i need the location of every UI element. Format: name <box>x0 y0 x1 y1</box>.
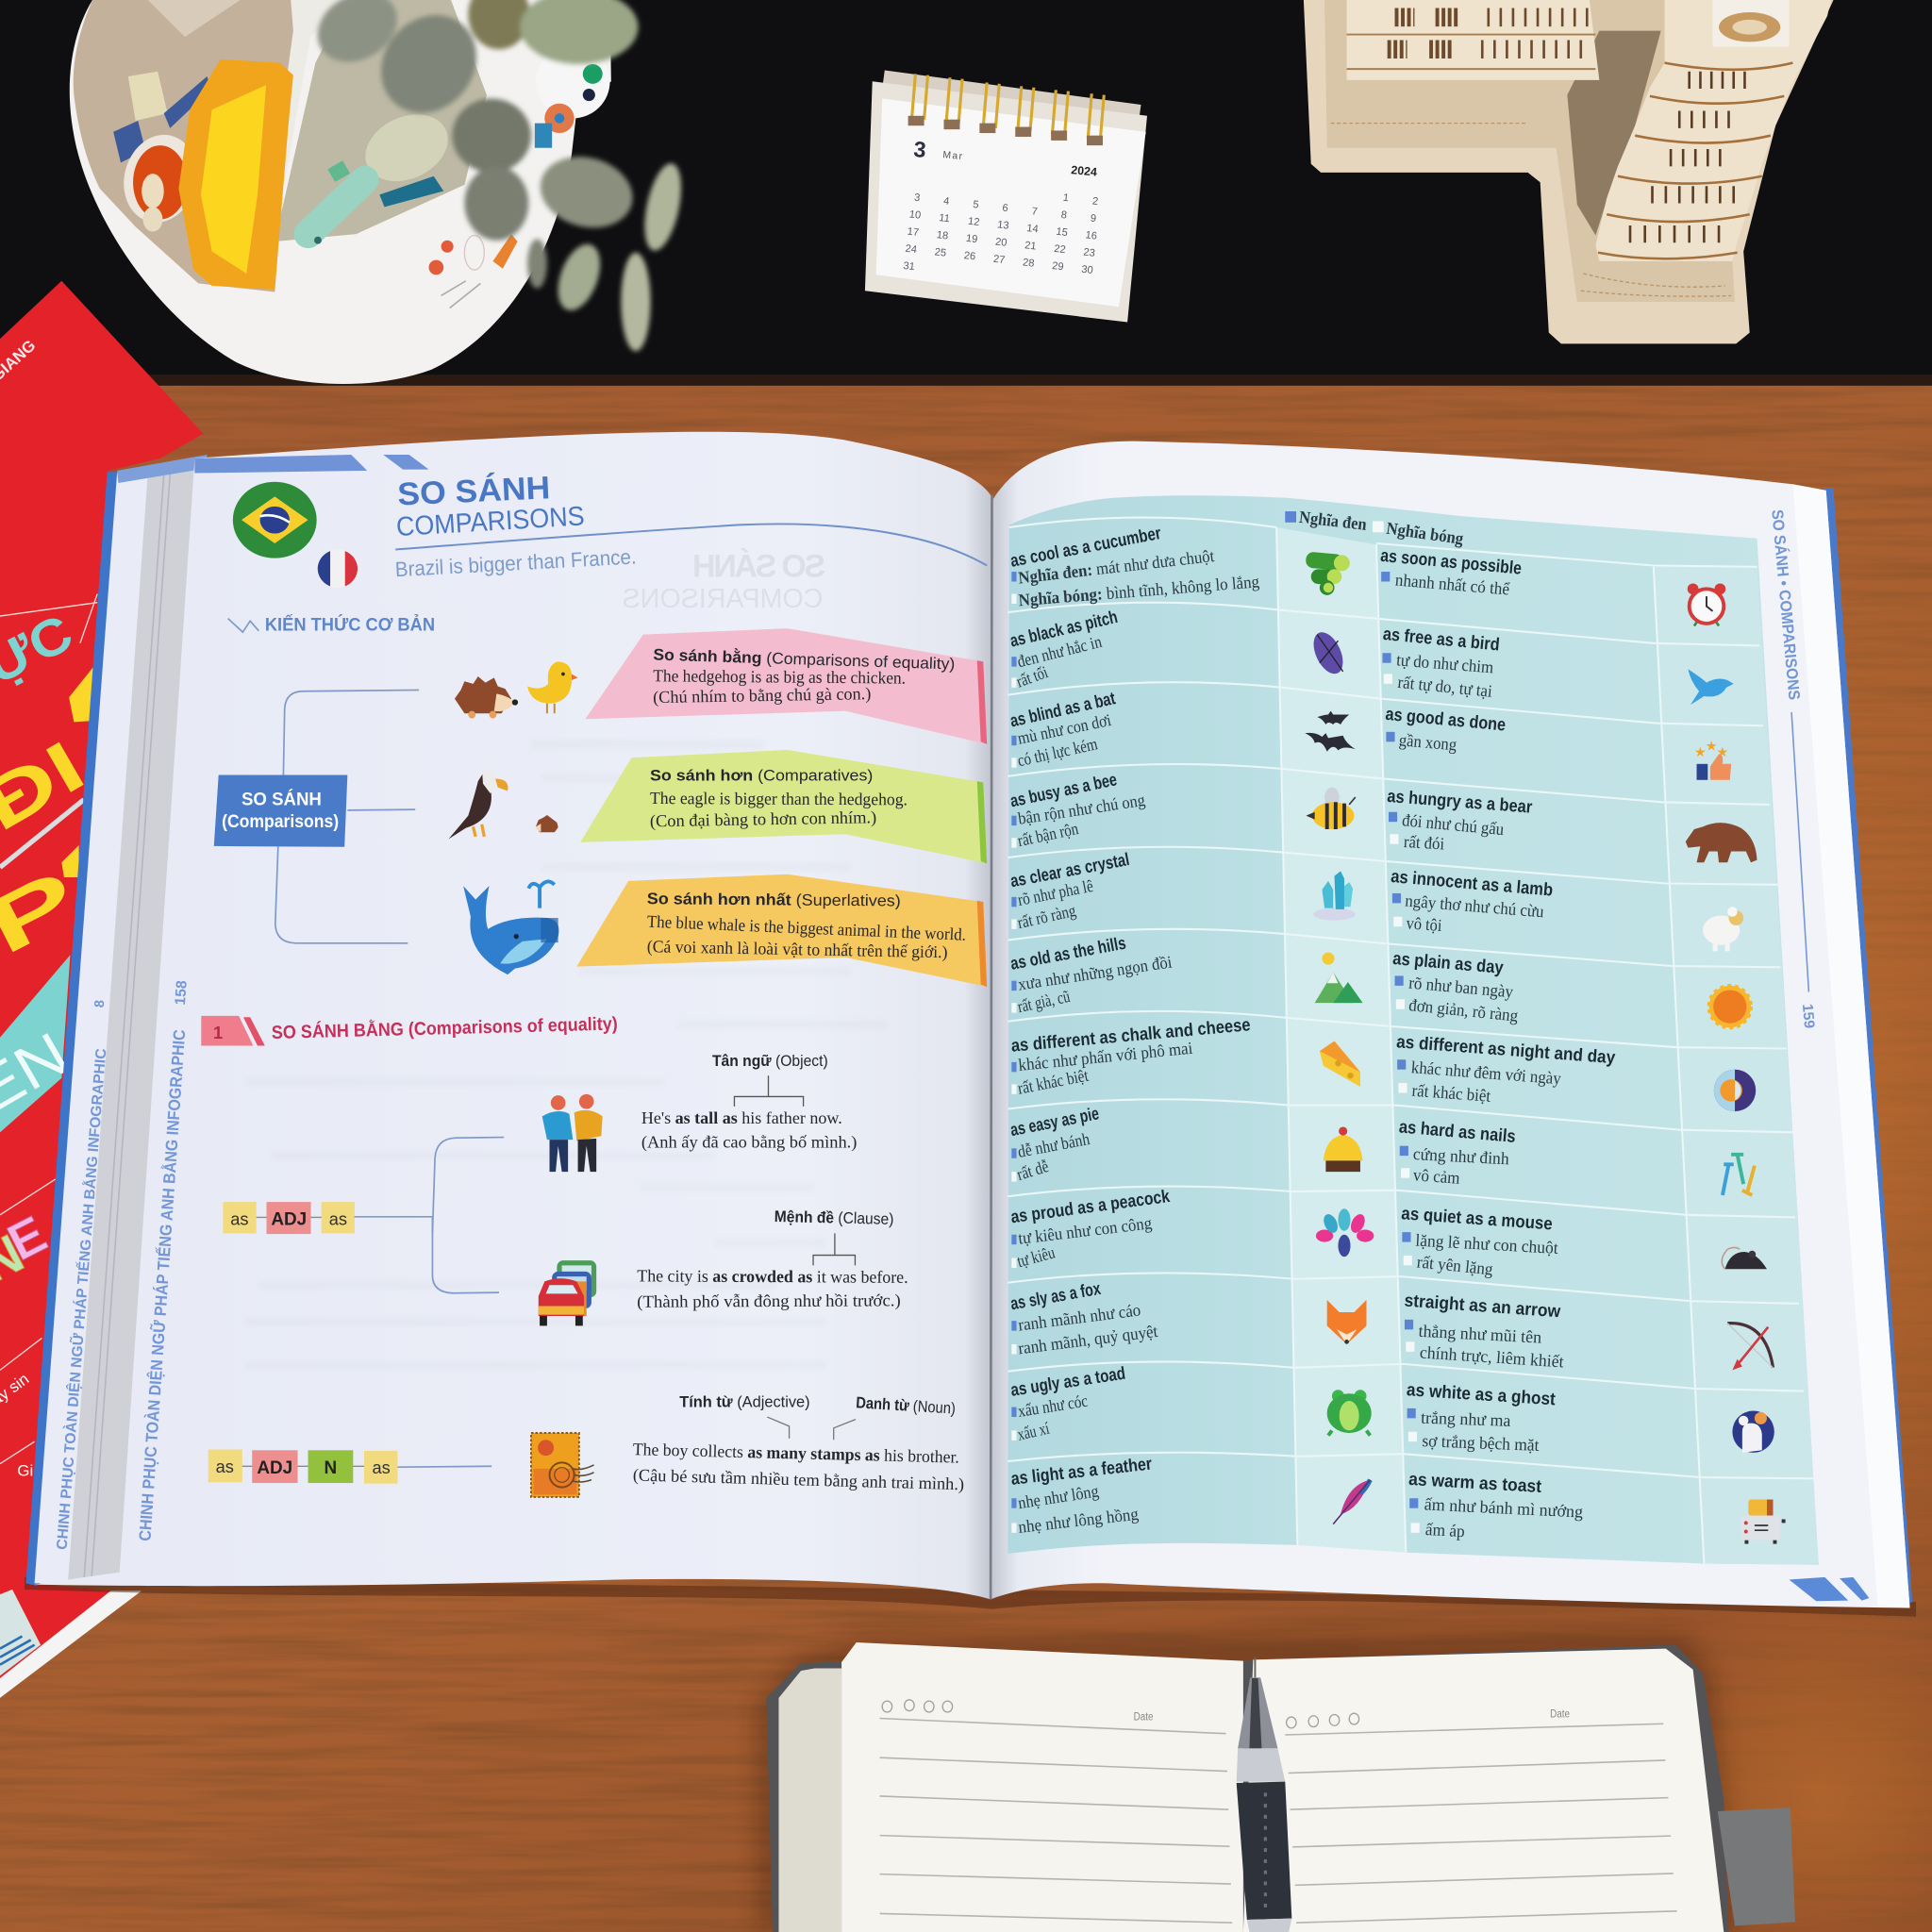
formula: as ADJ as: ADJ <box>271 1209 307 1229</box>
desk calendar March 2024: 2024 <box>1071 163 1098 179</box>
page number 8: 8 <box>92 1000 108 1008</box>
as white as a ghost: sợ trắng bệch mặt <box>1422 1431 1540 1455</box>
as quiet as a mouse <box>1401 1204 1558 1279</box>
shadow under open book <box>25 1577 1916 1617</box>
icon: bear <box>1686 823 1757 862</box>
as warm as toast: ấm áp <box>1424 1520 1465 1541</box>
desk calendar March 2024: 5 <box>973 199 979 211</box>
banner: comparisons of equality: (Chú nhím to bằng chú gà con.) <box>653 684 871 708</box>
table background <box>1008 495 1819 1565</box>
desk calendar March 2024: 12 <box>967 216 980 228</box>
plant pot with stationery <box>70 0 688 384</box>
example: The city is as crowded: (Thành phố vẫn đông như hồi trước.) <box>637 1291 901 1312</box>
desk calendar March 2024: 17 <box>907 226 920 239</box>
icon: bow and arrow <box>1727 1324 1774 1370</box>
straight as an arrow: thẳng như mũi tên <box>1418 1322 1542 1347</box>
annotation: adjective and noun: Tính từ (Adjective) <box>679 1393 810 1411</box>
example: The boy collects: The boy collects as many stamps as his brother. <box>633 1440 959 1467</box>
as ugly as a toad: as ugly as a toad <box>1009 1364 1126 1401</box>
formula: as ADJ as: as <box>329 1208 347 1228</box>
desk calendar March 2024: 19 <box>965 233 978 245</box>
right page <box>991 441 1909 1607</box>
formula: as ADJ as <box>223 1202 355 1234</box>
eucalyptus leaves <box>305 0 688 351</box>
icon: alarm clock <box>1688 583 1725 626</box>
as clear as crystal: rõ như pha lê <box>1016 876 1094 909</box>
icon: small hedgehog <box>535 815 558 832</box>
show-through mirrored heading: SO SÁNH <box>692 548 825 584</box>
desk calendar March 2024: 25 <box>934 246 947 259</box>
black desk mat <box>0 0 1932 386</box>
icon: mouse <box>1722 1247 1767 1269</box>
icon: two people <box>542 1094 603 1172</box>
banner: comparatives: The eagle is bigger than the hedgehog. <box>650 789 908 808</box>
left notebook page <box>841 1642 1243 1932</box>
right column: similes <box>1379 546 1616 1541</box>
as hungry as a bear: rất đói <box>1403 832 1445 854</box>
icon: fox <box>1327 1300 1366 1344</box>
banner: superlatives <box>576 874 987 987</box>
as plain as day: đơn giản, rõ ràng <box>1407 995 1519 1025</box>
as warm as toast: ấm như bánh mì nướng <box>1424 1494 1584 1522</box>
notebook with pen: Date <box>1550 1708 1570 1721</box>
desk calendar March 2024: 2 <box>1091 195 1099 208</box>
as busy as a bee <box>1008 770 1146 850</box>
as free as a bird: rất tự do, tự tại <box>1397 673 1493 701</box>
left page <box>35 432 993 1599</box>
desk calendar March 2024: 30 <box>1081 264 1093 276</box>
red book under main book: E <box>0 1204 56 1272</box>
desk calendar March 2024: 22 <box>1054 243 1066 256</box>
show-through mirrored heading: COMPARISONS <box>623 584 823 614</box>
icon: sun <box>1709 986 1751 1027</box>
icon: peacock <box>1316 1208 1374 1257</box>
as hungry as a bear: as hungry as a bear <box>1387 787 1533 818</box>
as blind as a bat <box>1008 689 1118 770</box>
as innocent as a lamb: vô tội <box>1406 913 1442 935</box>
as different as night and day <box>1395 1032 1616 1106</box>
desk calendar March 2024: 20 <box>994 237 1008 249</box>
as blind as a bat: as blind as a bat <box>1008 689 1118 731</box>
icon: pitch <box>1307 627 1349 678</box>
as different as night and day: as different as night and day <box>1395 1032 1616 1068</box>
vertical book title on left page: CHINH PHỤC TOÀN DIỆN NGỮ PHÁP TIẾNG ANH BẰNG INFOGRAPHIC <box>134 1028 189 1541</box>
banner: comparisons of equality: The hedgehog is as big as the chicken. <box>653 666 906 688</box>
as different as night and day: rất khác biệt <box>1411 1081 1491 1106</box>
pen <box>1237 1657 1291 1932</box>
icon: bee <box>1306 788 1356 829</box>
desk calendar March 2024: 15 <box>1056 226 1068 239</box>
desk calendar March 2024: 4 <box>942 195 950 208</box>
as white as a ghost <box>1406 1380 1557 1455</box>
icon: stars and thumb up: ★ <box>1694 745 1707 760</box>
as hungry as a bear: đói như chú gấu <box>1401 810 1505 839</box>
legend: literal and figurative meaning <box>1285 508 1465 548</box>
as quiet as a mouse: as quiet as a mouse <box>1401 1204 1553 1234</box>
heading: So sánh Comparisons: COMPARISONS <box>395 501 585 542</box>
as soon as possible <box>1379 546 1523 599</box>
vertical book title on outer edge: CHINH PHỤC TOÀN DIỆN NGỮ PHÁP TIẾNG ANH BẰNG INFOGRAPHIC <box>52 1048 109 1550</box>
icon: frog <box>1327 1390 1372 1436</box>
as blind as a bat: có thị lực kém <box>1016 734 1099 770</box>
annotation: clause: Mệnh đề (Clause) <box>774 1208 894 1228</box>
desk calendar March 2024: 24 <box>905 243 918 256</box>
example sentence: Brazil is bigger than France: Brazil is bigger than France. <box>394 544 637 581</box>
as different as chalk and cheese <box>1010 1015 1251 1098</box>
example: He's as tall as his father <box>641 1108 857 1153</box>
as quiet as a mouse: lặng lẽ như con chuột <box>1415 1231 1558 1257</box>
as plain as day <box>1391 949 1519 1025</box>
straight as an arrow: straight as an arrow <box>1404 1291 1561 1322</box>
as different as chalk and cheese: as different as chalk and cheese <box>1010 1015 1251 1057</box>
as hard as nails: vô cảm <box>1412 1165 1460 1188</box>
icon: mountain <box>1315 953 1363 1003</box>
as cool as a cucumber: Nghĩa đen: mát như dưa chuột <box>1017 546 1215 588</box>
as black as pitch <box>1008 608 1120 691</box>
right blue cover edge <box>1824 488 1912 1607</box>
formula: as ADJ N as: as <box>216 1457 234 1476</box>
left page stack <box>68 460 197 1585</box>
wooden Big Ben model <box>1304 0 1834 343</box>
as easy as pie: as easy as pie <box>1008 1104 1101 1141</box>
desk calendar March 2024: 28 <box>1022 257 1035 270</box>
as good as done: gần xong <box>1398 730 1457 754</box>
desk calendar March 2024: Mar <box>942 150 964 162</box>
annotation: clause <box>774 1208 894 1265</box>
show-through mirrored heading <box>623 548 825 614</box>
box: So sánh Comparisons <box>214 775 347 847</box>
desk calendar March 2024: 7 <box>1031 206 1038 218</box>
as plain as day: as plain as day <box>1391 949 1505 978</box>
icon: cupcake pie <box>1324 1126 1363 1172</box>
as soon as possible: nhanh nhất có thể <box>1394 570 1511 599</box>
connector: as ADJ as branches <box>355 1138 504 1293</box>
as hungry as a bear <box>1387 787 1533 854</box>
desk calendar March 2024: 26 <box>963 250 976 262</box>
as proud as a peacock: tự kiêu như con công <box>1017 1213 1153 1248</box>
as good as done <box>1385 705 1507 754</box>
legend: literal and figurative meaning: Nghĩa đen <box>1298 508 1368 534</box>
as busy as a bee: bận rộn như chú ong <box>1017 791 1146 828</box>
as innocent as a lamb: ngây thơ như chú cừu <box>1405 891 1544 921</box>
notebook with pen <box>754 1637 1795 1932</box>
as light as a feather: nhẹ như lông <box>1017 1481 1100 1512</box>
as ugly as a toad: xấu xí <box>1016 1419 1051 1444</box>
box: So sánh Comparisons: SO SÁNH <box>242 790 322 810</box>
icon: eagle <box>448 766 508 839</box>
as old as the hills: xưa như những ngọn đồi <box>1017 952 1174 994</box>
icon: blue whale <box>463 881 558 974</box>
formula: as ADJ N as: ADJ <box>257 1458 292 1478</box>
heading: So sánh Comparisons <box>395 470 987 566</box>
as different as chalk and cheese: khác như phấn với phô mai <box>1018 1039 1193 1074</box>
icon: ghost <box>1732 1411 1774 1453</box>
as cool as a cucumber: Nghĩa bóng: bình tĩnh, không lo lắng <box>1018 572 1260 609</box>
banner: comparisons of equality: So sánh bằng (Comparisons of equality) <box>653 645 956 673</box>
open book <box>25 432 1912 1607</box>
icon: nails <box>1723 1155 1755 1195</box>
banner: superlatives: So sánh hơn nhất (Superlatives) <box>647 890 901 910</box>
example: He's as tall as his father: (Anh ấy đã cao bằng bố mình.) <box>641 1133 857 1153</box>
icon: France flag <box>317 549 358 588</box>
icon: stars and thumb up: ★ <box>1716 745 1728 760</box>
as quiet as a mouse: rất yên lặng <box>1416 1252 1494 1279</box>
icon: feather <box>1333 1480 1370 1524</box>
formula: as ADJ N as <box>208 1450 491 1484</box>
as white as a ghost: trắng như ma <box>1421 1408 1511 1430</box>
desk calendar March 2024: 3 <box>913 192 921 204</box>
banner: superlatives: (Cá voi xanh là loài vật to nhất trên thế giới.) <box>647 937 948 962</box>
as sly as a fox: ranh mãnh như cáo <box>1017 1300 1141 1335</box>
as hard as nails <box>1398 1117 1516 1188</box>
desk calendar March 2024: 21 <box>1024 240 1037 253</box>
as easy as pie <box>1008 1104 1101 1184</box>
as clear as crystal: as clear as crystal <box>1008 850 1131 891</box>
example: The boy collects: (Cậu bé sưu tầm nhiều tem bằng anh trai mình.) <box>633 1465 964 1494</box>
as good as done: as good as done <box>1385 705 1507 736</box>
section label: Kiến thức cơ bản: KIẾN THỨC CƠ BẢN <box>265 613 435 636</box>
heading: So sánh Comparisons: SO SÁNH <box>397 470 551 513</box>
as black as pitch: rất tối <box>1014 662 1050 691</box>
as sly as a fox <box>1009 1279 1158 1357</box>
as warm as toast: as warm as toast <box>1408 1470 1542 1497</box>
as white as a ghost: as white as a ghost <box>1406 1380 1557 1409</box>
legend: literal and figurative meaning: Nghĩa bóng <box>1385 519 1465 548</box>
desk calendar March 2024: 9 <box>1090 213 1097 225</box>
icon: stars and thumb up <box>1694 739 1731 780</box>
right notebook page <box>1243 1649 1724 1932</box>
straight as an arrow: chính trực, liêm khiết <box>1419 1342 1564 1371</box>
as different as chalk and cheese: rất khác biệt <box>1016 1066 1090 1098</box>
as clear as crystal <box>1008 850 1131 932</box>
desk calendar March 2024: 29 <box>1052 260 1064 273</box>
icon: cucumber <box>1306 552 1350 595</box>
page number 159: 159 <box>1799 1003 1817 1029</box>
as ugly as a toad <box>1009 1364 1126 1444</box>
as warm as toast <box>1408 1470 1584 1541</box>
desk calendar March 2024: 6 <box>1002 203 1008 214</box>
desk calendar March 2024: 14 <box>1026 223 1039 235</box>
formula: as ADJ N as: as <box>372 1457 391 1477</box>
straight as an arrow <box>1404 1291 1564 1371</box>
annotation: adjective and noun: Danh từ (Noun) <box>856 1393 956 1418</box>
as innocent as a lamb: as innocent as a lamb <box>1390 867 1554 901</box>
icon: crystal <box>1313 871 1356 921</box>
icon: bats <box>1305 711 1356 752</box>
annotation: object <box>712 1052 828 1107</box>
example: The city is as crowded <box>637 1266 908 1312</box>
banner: comparatives: (Con đại bàng to hơn con nhím.) <box>650 808 876 831</box>
section heading 1: comparisons of equality: SO SÁNH BẰNG (Comparisons of equality) <box>272 1011 618 1043</box>
as easy as pie: rất dễ <box>1014 1157 1051 1184</box>
desk calendar March 2024: 18 <box>936 229 949 242</box>
icon: day and night <box>1714 1070 1756 1111</box>
example: The boy collects <box>633 1440 964 1494</box>
example: The city is as crowded: The city is as crowded as it was before. <box>637 1266 908 1287</box>
page number 158: 158 <box>173 980 191 1006</box>
right page corner tabs <box>1789 1577 1869 1601</box>
mind map connectors <box>275 690 419 943</box>
desk calendar March 2024: 16 <box>1085 229 1098 242</box>
as hard as nails: as hard as nails <box>1398 1117 1516 1147</box>
as black as pitch: as black as pitch <box>1008 608 1120 652</box>
left column: similes <box>1008 524 1260 1537</box>
as plain as day: rõ như ban ngày <box>1408 974 1515 1001</box>
icon: blue bird <box>1688 669 1734 705</box>
as light as a feather: as light as a feather <box>1010 1454 1154 1490</box>
as blind as a bat: mù như con dơi <box>1016 710 1112 748</box>
desk calendar March 2024: 8 <box>1060 209 1068 222</box>
red book under main book: Gi <box>17 1462 33 1480</box>
desk calendar March 2024: 13 <box>997 219 1009 232</box>
red book under main book <box>0 281 204 1698</box>
formula: as ADJ as: as <box>230 1208 249 1228</box>
icon: lamb <box>1703 907 1743 951</box>
as proud as a peacock <box>1009 1187 1172 1271</box>
as cool as a cucumber: as cool as a cucumber <box>1008 524 1163 572</box>
as sly as a fox: ranh mãnh, quỷ quyệt <box>1017 1322 1158 1357</box>
left page edge strip <box>35 470 150 1585</box>
annotation: adjective and noun <box>679 1393 956 1440</box>
as old as the hills: rất già, cũ <box>1016 987 1072 1016</box>
icon: Brazil flag <box>233 482 317 558</box>
desk calendar March 2024: 10 <box>908 208 922 222</box>
as easy as pie: dễ như bánh <box>1016 1129 1091 1161</box>
example: He's as tall as his father: He's as tall as his father now. <box>641 1108 842 1127</box>
as light as a feather <box>1010 1454 1154 1537</box>
desk calendar March 2024: 27 <box>992 254 1006 266</box>
icon: cheese <box>1320 1041 1360 1087</box>
formula: as ADJ N as: N <box>325 1458 337 1478</box>
as innocent as a lamb <box>1390 867 1554 935</box>
notebook cover <box>766 1645 1728 1932</box>
icon: chick <box>527 661 578 713</box>
annotation: object: Tân ngữ (Object) <box>712 1052 828 1070</box>
as busy as a bee: as busy as a bee <box>1008 770 1119 811</box>
as free as a bird: tự do như chim <box>1396 650 1494 676</box>
desk calendar March 2024: 1 <box>1062 192 1070 204</box>
desk calendar March 2024: 11 <box>939 212 951 225</box>
as hard as nails: cứng như đinh <box>1412 1144 1509 1168</box>
banner: comparisons of equality <box>585 628 987 744</box>
icon: postage stamp <box>531 1433 594 1497</box>
vertical section label on right page: SO SÁNH • COMPARISONS <box>1768 508 1803 701</box>
as old as the hills: as old as the hills <box>1008 934 1127 974</box>
as free as a bird <box>1382 625 1501 701</box>
as free as a bird: as free as a bird <box>1382 625 1501 656</box>
desk calendar March 2024 <box>865 70 1147 323</box>
as ugly as a toad: xấu như cóc <box>1017 1391 1089 1421</box>
bookmark strap <box>1718 1807 1795 1925</box>
section heading 1: comparisons of equality: 1 <box>213 1023 223 1042</box>
as black as pitch: đen như hắc in <box>1015 632 1104 671</box>
icon: cars in traffic <box>539 1260 596 1325</box>
as different as night and day: khác như đêm với ngày <box>1410 1058 1562 1088</box>
banner: comparatives <box>580 750 987 864</box>
as busy as a bee: rất bận rộn <box>1016 819 1080 850</box>
banner: comparatives: So sánh hơn (Comparatives) <box>650 767 873 785</box>
as proud as a peacock: as proud as a peacock <box>1009 1187 1172 1227</box>
left blue cover edge <box>25 472 118 1586</box>
left page top blue tabs <box>194 455 429 474</box>
icon: toaster <box>1741 1500 1786 1544</box>
desk calendar March 2024: 23 <box>1083 247 1095 259</box>
as proud as a peacock: tự kiêu <box>1015 1242 1057 1271</box>
as cool as a cucumber <box>1008 524 1260 609</box>
as sly as a fox: as sly as a fox <box>1009 1279 1103 1314</box>
desk calendar March 2024: 31 <box>903 260 915 273</box>
icon: stars and thumb up: ★ <box>1706 739 1718 754</box>
as light as a feather: nhẹ như lông hồng <box>1017 1505 1140 1537</box>
as soon as possible: as soon as possible <box>1379 546 1523 579</box>
notebook shadow <box>754 1637 1740 1932</box>
desk calendar March 2024: 3 <box>912 137 927 162</box>
box: So sánh Comparisons: (Comparisons) <box>222 812 339 832</box>
as old as the hills <box>1008 934 1174 1016</box>
as clear as crystal: rất rõ ràng <box>1016 901 1077 932</box>
icon: hedgehog <box>455 676 518 718</box>
banner: superlatives: The blue whale is the biggest animal in the world. <box>647 912 966 944</box>
notebook with pen: Date <box>1134 1710 1154 1723</box>
